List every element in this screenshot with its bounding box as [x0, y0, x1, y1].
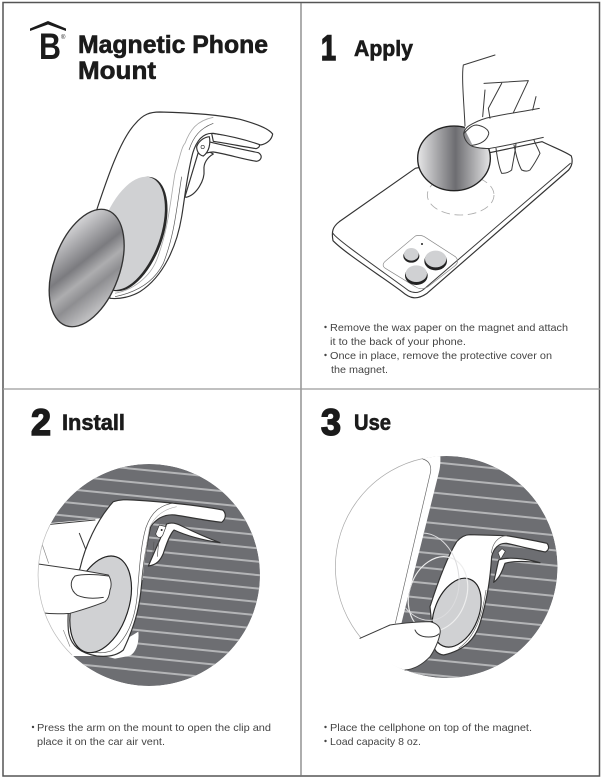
hand behind the mount: [39, 518, 100, 656]
thumb: [360, 622, 440, 670]
title: Mount: [78, 57, 157, 85]
step 2 heading: Install: [62, 410, 125, 435]
hand: [463, 55, 544, 173]
title: [78, 31, 268, 85]
step 1 instructions: [324, 322, 568, 376]
step 1 heading: 1: [321, 29, 336, 68]
circle outline on white side: [335, 458, 423, 670]
title: Magnetic Phone: [78, 31, 268, 59]
magnet disc: [423, 571, 491, 654]
step 2 instructions: place it on the car air vent.: [37, 736, 165, 748]
white base behind mount: [106, 632, 139, 659]
step 3 instructions: Load capacity 8 oz.: [330, 736, 421, 748]
step 2 instructions: [32, 722, 271, 748]
phone magnet rings: [406, 532, 468, 630]
illustration: hand and mount: [360, 459, 549, 670]
brand logo: B: [39, 26, 61, 67]
step 3 instructions: [324, 722, 532, 748]
step 3 heading: [321, 402, 391, 443]
brand logo: [30, 21, 66, 67]
step 3 heading: 3: [321, 402, 341, 443]
illustration: air vent circle with hand: [39, 464, 260, 686]
step 3 instructions: Place the cellphone on top of the magnet.: [330, 722, 532, 734]
step 2 heading: 2: [31, 402, 51, 443]
panel: step 3 use: [321, 402, 570, 748]
step 1 instructions: it to the back of your phone.: [330, 336, 466, 348]
panel: step 1 apply: [321, 29, 572, 376]
step 3 heading: Use: [354, 410, 391, 435]
step 1 instructions: Once in place, remove the protective cover on: [330, 350, 552, 362]
step 2 instructions: Press the arm on the mount to open the clip and: [37, 722, 271, 734]
circle outline on hand side: [38, 525, 72, 655]
phone edge line: [395, 459, 431, 623]
panel: product overview: [30, 21, 273, 337]
step 1 instructions: the magnet.: [331, 364, 388, 376]
phone silhouette: [336, 456, 440, 638]
illustration: vent circle with phone: [402, 456, 558, 678]
step 1 heading: Apply: [354, 36, 414, 61]
magnet disc: [418, 126, 490, 191]
lower clip arm: [494, 558, 540, 582]
phone: [332, 142, 572, 298]
illustration: magnetic mount with metal plate: [35, 112, 273, 337]
brand logo: ®: [61, 34, 66, 41]
mount body: [430, 535, 549, 655]
step 1 heading: [321, 29, 414, 68]
magnet disc: [69, 555, 132, 654]
step 2 heading: [31, 402, 125, 443]
dashed placement outline: [427, 175, 494, 215]
thumb: [68, 570, 110, 613]
step 1 instructions: Remove the wax paper on the magnet and attach: [330, 322, 568, 334]
illustration: applying magnet to phone: [332, 55, 572, 298]
panel: step 2 install: [20, 402, 271, 748]
mount body: [68, 500, 225, 656]
lower clip arm: [148, 523, 220, 566]
